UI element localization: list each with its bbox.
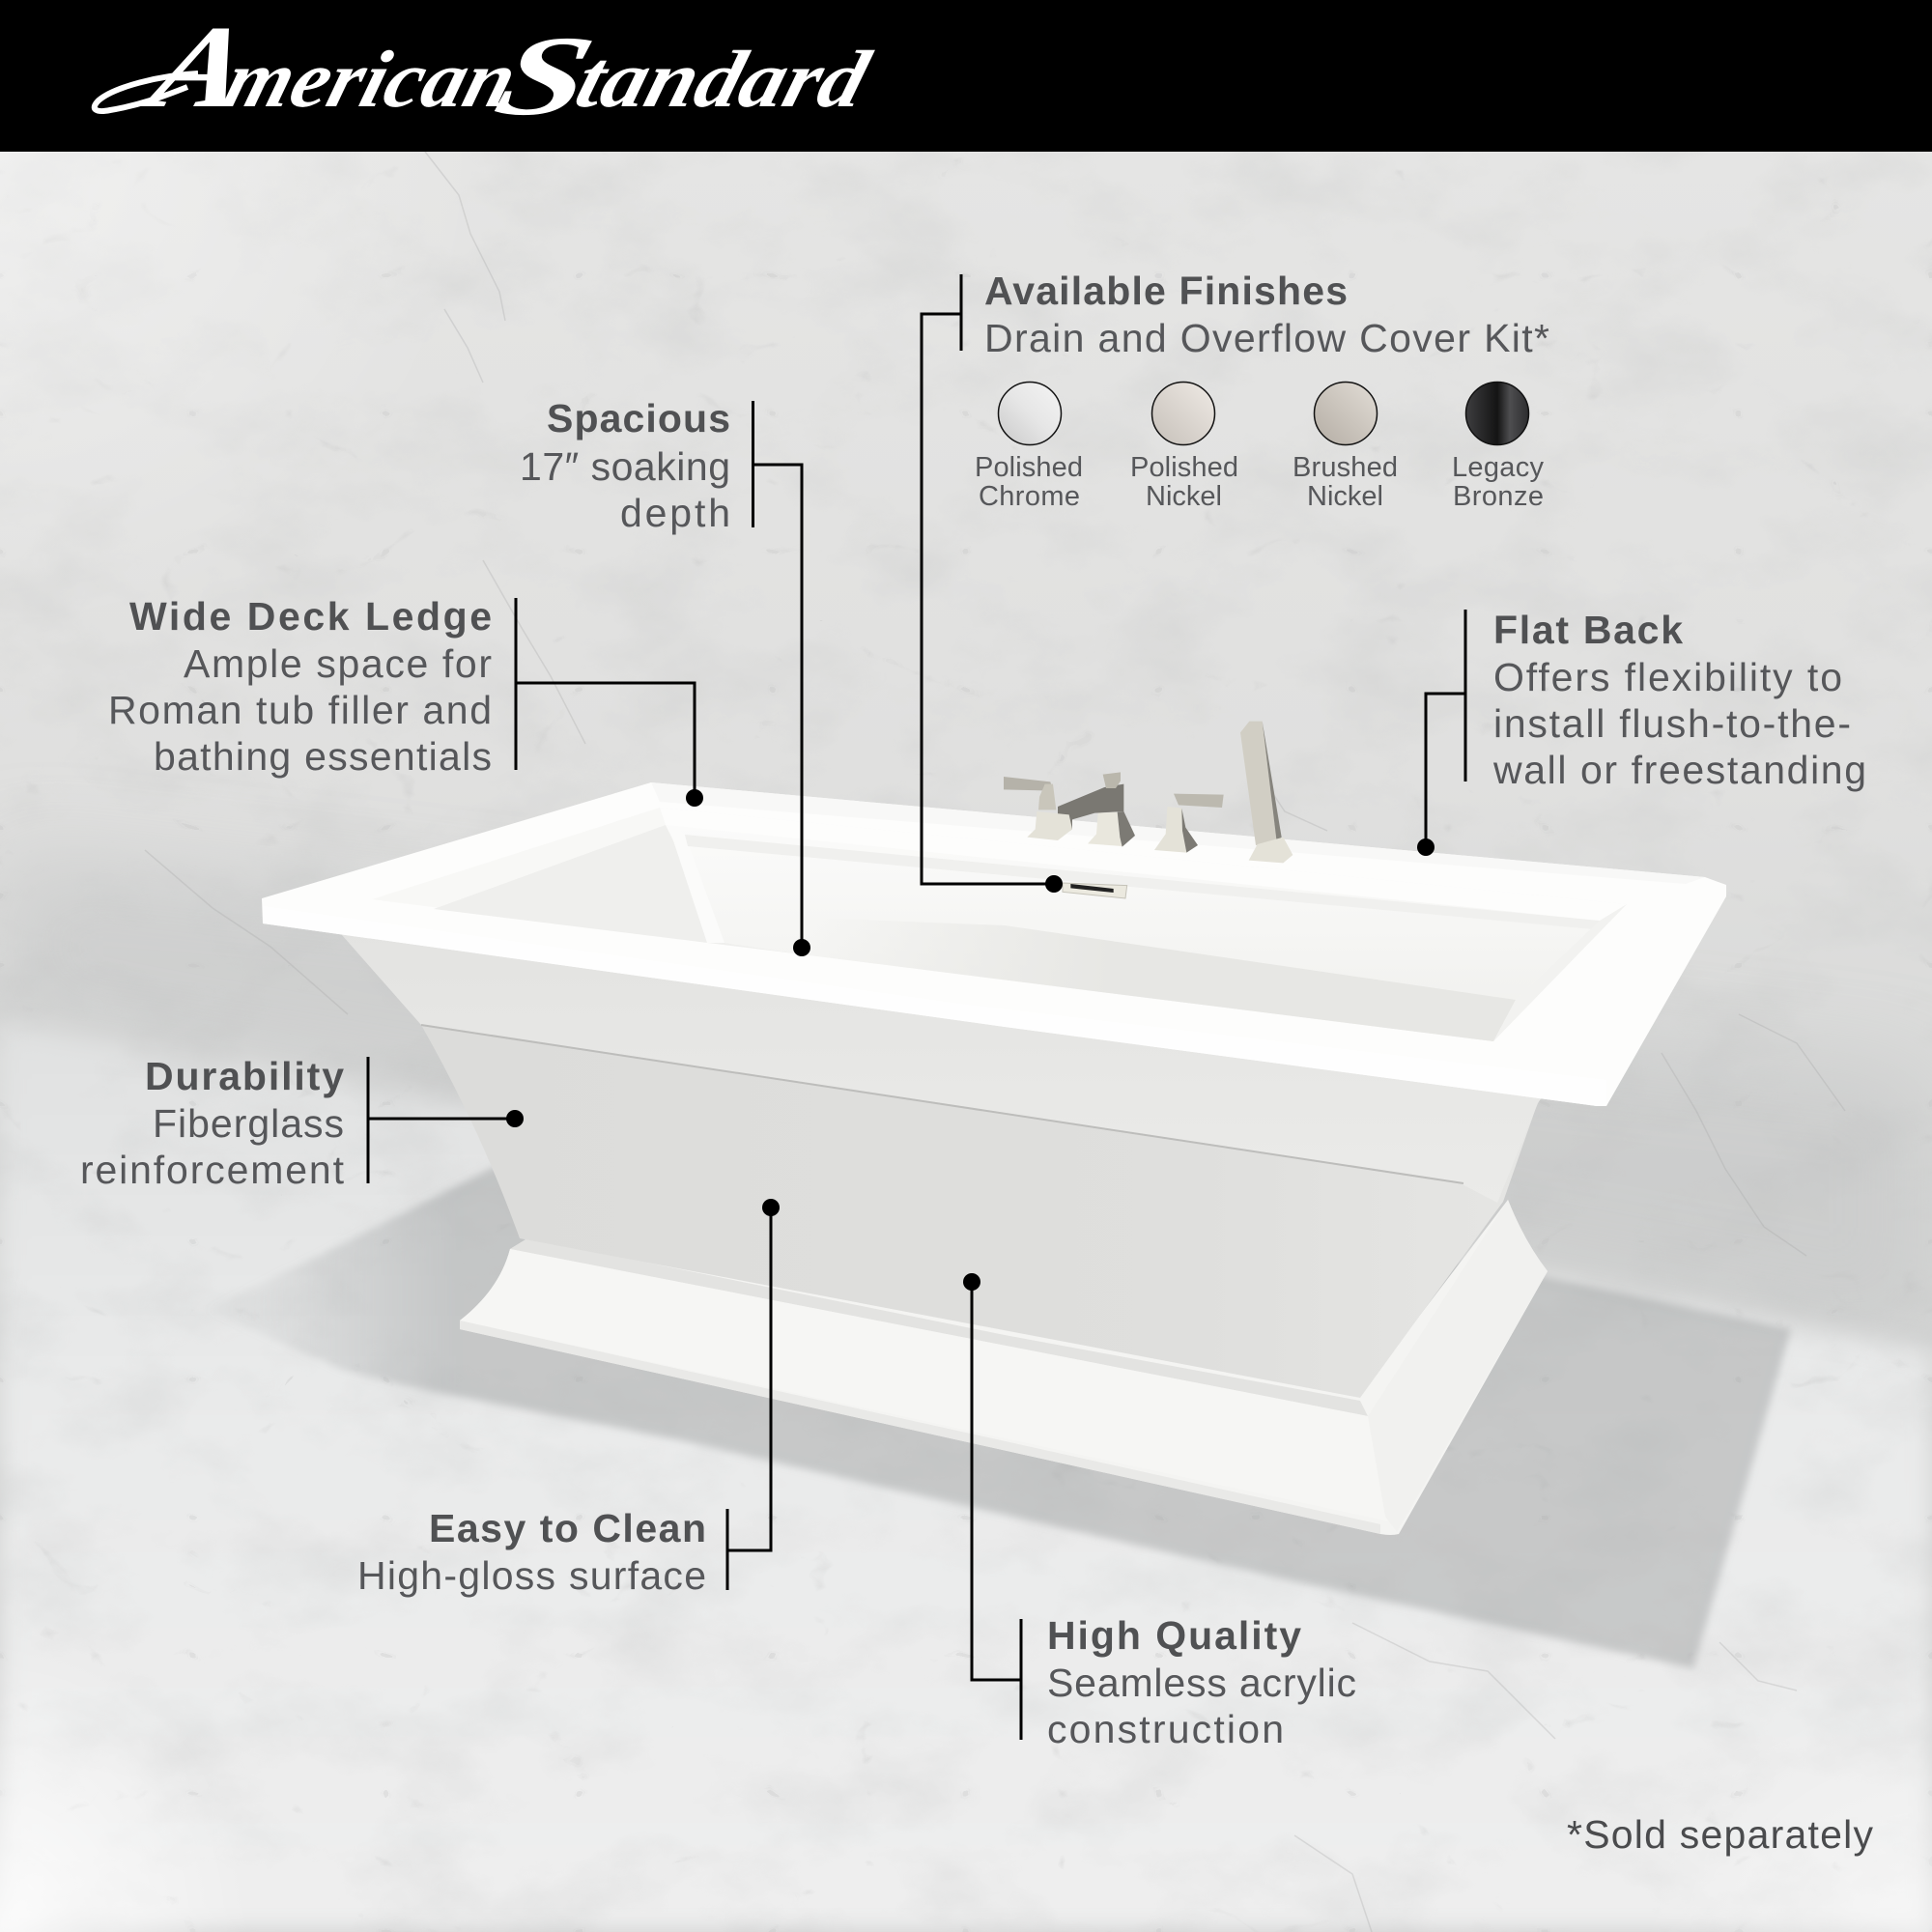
footnote: *Sold separately bbox=[1567, 1812, 1874, 1857]
callout: spacious: Spacious bbox=[547, 396, 730, 440]
swatch: brushed nickel: Brushed bbox=[1293, 452, 1398, 483]
tub rim bbox=[262, 782, 1726, 1106]
tub main body bbox=[421, 1025, 1538, 1398]
callout: available finishes bbox=[922, 269, 1549, 893]
swatch: brushed nickel bbox=[1293, 383, 1398, 512]
swatch: polished nickel: Nickel bbox=[1146, 481, 1222, 512]
swatch: polished chrome bbox=[975, 383, 1083, 512]
icon: faucet bbox=[1004, 722, 1293, 898]
header band bbox=[0, 0, 1932, 152]
swatch: polished chrome: Polished bbox=[975, 452, 1083, 483]
callout: available finishes: Drain and Overflow Cover Kit* bbox=[984, 316, 1549, 360]
callout: easy to clean bbox=[357, 1199, 780, 1598]
logo: A bbox=[129, 1, 267, 131]
tub plinth base bbox=[460, 1200, 1548, 1535]
swatch: brushed nickel: Nickel bbox=[1307, 481, 1383, 512]
swatch: polished chrome: Chrome bbox=[979, 481, 1080, 512]
callout: flat back: Offers flexibility to bbox=[1493, 655, 1842, 699]
callout: wide deck ledge: Wide Deck Ledge bbox=[129, 594, 492, 639]
callout: wide deck ledge: bathing essentials bbox=[154, 734, 492, 779]
tub basin bbox=[372, 808, 1627, 1041]
swatch: legacy bronze: Bronze bbox=[1453, 481, 1544, 512]
swatch: polished nickel: Polished bbox=[1130, 452, 1238, 483]
callout: flat back: install flush-to-the- bbox=[1493, 701, 1851, 746]
bathtub bbox=[262, 722, 1726, 1535]
callout: durability: reinforcement bbox=[80, 1148, 345, 1192]
callout: flat back bbox=[1417, 608, 1866, 856]
callout: spacious bbox=[520, 396, 810, 956]
callout: easy to clean: High-gloss surface bbox=[357, 1553, 706, 1598]
callout: high quality: High Quality bbox=[1047, 1613, 1301, 1658]
right handle bbox=[1154, 794, 1224, 853]
callout: spacious: 17″ soaking bbox=[520, 444, 730, 489]
callout: wide deck ledge: Ample space for bbox=[184, 641, 492, 686]
knob bbox=[1103, 772, 1121, 788]
swatch: legacy bronze bbox=[1452, 383, 1544, 512]
spout bbox=[1058, 784, 1123, 838]
logo: S bbox=[483, 14, 607, 139]
tub upper skirt bbox=[335, 927, 1546, 1203]
callout: flat back: wall or freestanding bbox=[1492, 748, 1866, 792]
callout: wide deck ledge: Roman tub filler and bbox=[108, 688, 492, 732]
callout: easy to clean: Easy to Clean bbox=[429, 1506, 706, 1550]
swatch: polished nickel bbox=[1130, 383, 1238, 512]
hand shower bbox=[1240, 722, 1293, 863]
floor shadows bbox=[207, 1159, 1791, 1668]
logo: merican bbox=[215, 35, 526, 125]
center base bbox=[1088, 811, 1135, 847]
callout: high quality: construction bbox=[1047, 1707, 1284, 1751]
left handle bbox=[1004, 777, 1072, 840]
callout: durability: Fiberglass bbox=[153, 1101, 344, 1146]
callout: wide deck ledge bbox=[108, 594, 703, 807]
logo bbox=[95, 1, 880, 139]
logo: tandard bbox=[567, 35, 880, 125]
swatch: legacy bronze: Legacy bbox=[1452, 452, 1544, 483]
callout: flat back: Flat Back bbox=[1493, 608, 1683, 652]
callout: durability: Durability bbox=[145, 1054, 344, 1098]
callout: high quality: Seamless acrylic bbox=[1047, 1661, 1356, 1705]
callout: spacious: depth bbox=[620, 491, 730, 535]
callout: durability bbox=[80, 1054, 524, 1192]
callout: available finishes: Available Finishes bbox=[984, 269, 1348, 313]
overflow plate bbox=[1063, 883, 1127, 898]
callout: high quality bbox=[963, 1273, 1356, 1751]
